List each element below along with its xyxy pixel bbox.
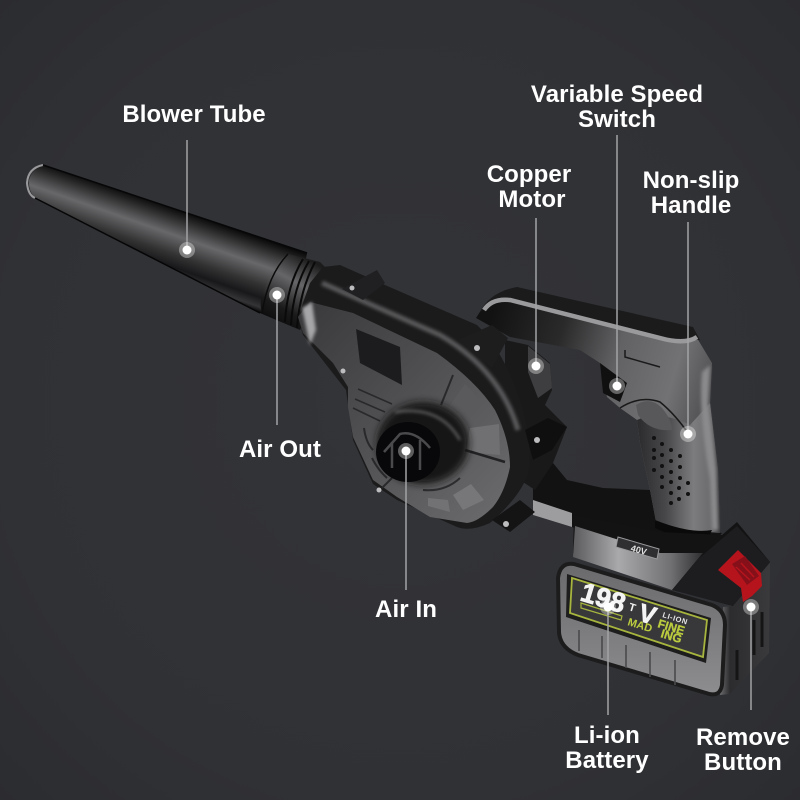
blower illustration xyxy=(27,165,770,695)
callout: blower tube: Blower Tube xyxy=(122,101,266,128)
callout: li-ion battery xyxy=(565,599,649,774)
callout: non-slip handle: Non-slip xyxy=(643,167,739,194)
callout: non-slip handle: Handle xyxy=(651,192,731,219)
callout: air in xyxy=(375,443,437,623)
battery mount: 40V xyxy=(630,543,648,557)
callout: li-ion battery: Battery xyxy=(565,747,649,774)
lower connector bar xyxy=(533,463,722,560)
battery label: V xyxy=(635,599,660,631)
callout: non-slip handle xyxy=(643,167,739,442)
battery label: T xyxy=(627,601,637,615)
callout: remove button: Button xyxy=(704,749,782,776)
battery label: 198 xyxy=(577,577,629,619)
motor housing xyxy=(505,340,567,490)
callout: remove button: Remove xyxy=(696,724,790,751)
battery label: MAD xyxy=(626,616,654,635)
battery label: FINE xyxy=(656,616,686,638)
battery label xyxy=(566,574,711,663)
remove button red latch xyxy=(718,550,762,602)
grip dots xyxy=(652,436,690,505)
callout: li-ion battery: Li-ion xyxy=(574,722,640,749)
callout: air in: Air In xyxy=(375,596,437,623)
battery label: ING xyxy=(659,626,684,646)
housing window xyxy=(356,329,402,385)
callout: air out: Air Out xyxy=(239,436,321,463)
air intake xyxy=(376,402,469,484)
callout: blower tube xyxy=(122,101,266,258)
housing vents xyxy=(353,389,392,421)
upper handle and pistol grip xyxy=(476,287,720,538)
callout: copper motor: Motor xyxy=(498,186,566,213)
trigger switch xyxy=(600,363,627,402)
callout: variable speed switch: Variable Speed xyxy=(531,81,703,108)
callout: copper motor xyxy=(487,161,571,374)
air out collar xyxy=(261,254,330,330)
battery xyxy=(558,550,770,695)
blower tube xyxy=(27,165,330,330)
callout: copper motor: Copper xyxy=(487,161,571,188)
callout: variable speed switch xyxy=(531,81,703,394)
battery mount xyxy=(573,515,770,606)
callout: air out xyxy=(239,287,321,463)
callout: remove button xyxy=(696,599,790,776)
battery label: LI-ION xyxy=(661,610,689,627)
lugs xyxy=(342,270,385,300)
callout: variable speed switch: Switch xyxy=(578,106,656,133)
blower housing xyxy=(298,265,567,532)
